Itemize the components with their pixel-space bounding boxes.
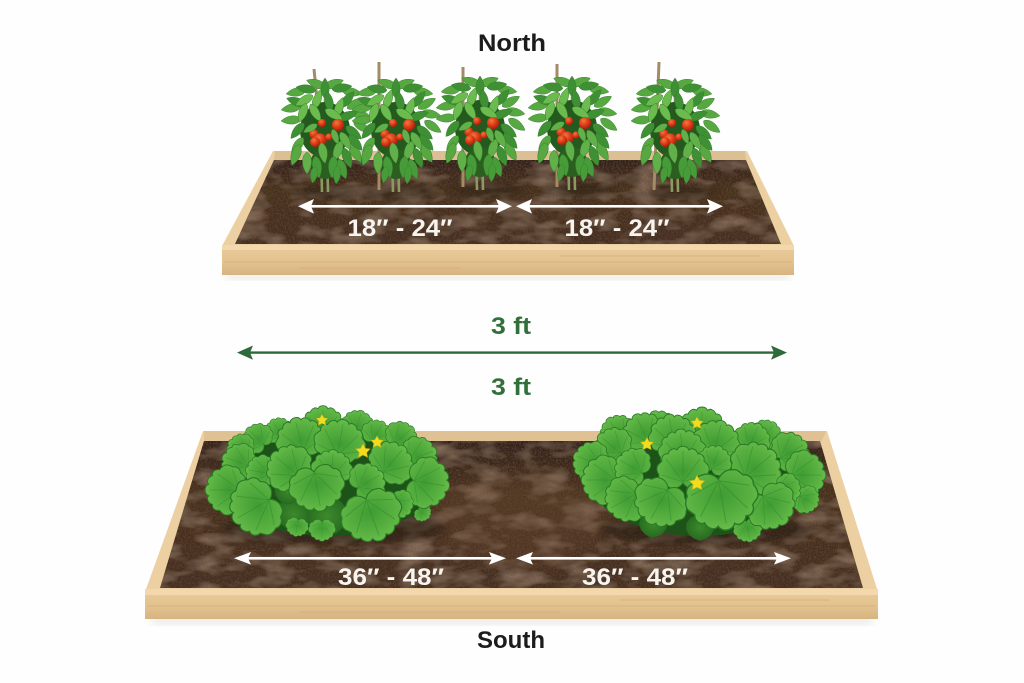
tomato plant 3	[435, 74, 527, 190]
flowers	[316, 414, 383, 457]
tomato plant 5	[630, 76, 722, 192]
soil: north	[235, 160, 781, 244]
tomato row	[280, 62, 722, 198]
label: tomato spacing 1: 18″ - 24″	[348, 215, 453, 242]
raised bed: north	[222, 151, 794, 280]
label: squash spacing 1: 36″ - 48″	[338, 564, 444, 591]
arrow: squash spacing 1	[234, 552, 506, 565]
tomato plant 2	[351, 76, 443, 192]
arrow: squash spacing 2	[516, 552, 791, 565]
squash plant: right	[567, 405, 826, 545]
stakes	[314, 62, 659, 190]
tomato plant 1	[280, 76, 372, 192]
arrow: 3 ft width	[237, 346, 787, 360]
heading: North: North	[478, 30, 546, 57]
arrow: tomato spacing 1	[298, 199, 512, 214]
flowers	[641, 417, 704, 490]
arrow: tomato spacing 2	[516, 199, 723, 214]
label: 3 ft upper: 3 ft	[491, 313, 531, 340]
tomato plant 4	[527, 74, 619, 190]
raised bed: south	[145, 431, 878, 625]
squash plant: left	[205, 406, 454, 551]
label: squash spacing 2: 36″ - 48″	[582, 564, 688, 591]
soil: south	[160, 441, 863, 588]
label: tomato spacing 2: 18″ - 24″	[564, 215, 670, 242]
label: 3 ft lower: 3 ft	[491, 374, 531, 401]
heading: South: South	[477, 627, 545, 654]
